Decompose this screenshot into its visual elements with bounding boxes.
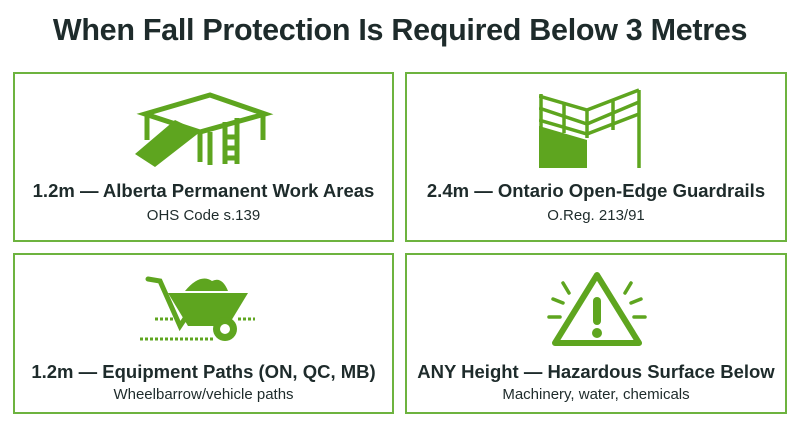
- subtext: OHS Code s.139: [147, 207, 260, 224]
- title: When Fall Protection Is Required Below 3 Metres: [53, 13, 747, 47]
- heading: 1.2m — Equipment Paths (ON, QC, MB): [31, 361, 376, 382]
- panel: any height: [405, 253, 787, 414]
- icon: platform with ramp and ladder: [135, 92, 274, 167]
- icon: warning: [547, 272, 647, 346]
- subtext: O.Reg. 213/91: [547, 207, 645, 224]
- panel: ontario: [405, 72, 787, 242]
- icon: guardrail: [539, 88, 641, 168]
- icon: wheelbarrow: [140, 276, 255, 341]
- panel: alberta: [13, 72, 394, 242]
- subtext: Wheelbarrow/vehicle paths: [113, 386, 294, 403]
- heading: 2.4m — Ontario Open-Edge Guardrails: [427, 180, 765, 201]
- panel: equipment paths: [13, 253, 394, 414]
- heading: ANY Height — Hazardous Surface Below: [417, 361, 775, 382]
- subtext: Machinery, water, chemicals: [502, 386, 690, 403]
- heading: 1.2m — Alberta Permanent Work Areas: [33, 180, 374, 201]
